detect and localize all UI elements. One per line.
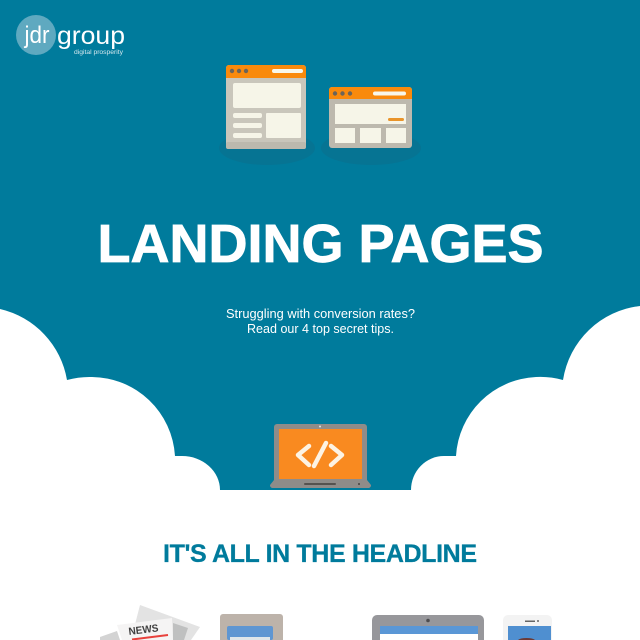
icon: smartphone	[503, 615, 552, 640]
cloud: right	[411, 306, 640, 500]
subtitle	[226, 307, 415, 336]
logo: jdr group: jdr	[24, 22, 50, 49]
logo: jdr group: digital prosperity	[74, 50, 123, 56]
cloud: left	[0, 309, 220, 500]
icon: laptop with code symbol	[270, 424, 371, 488]
icon: large tablet	[372, 615, 484, 640]
section heading: IT'S ALL IN THE HEADLINE	[163, 540, 477, 568]
icon: newspapers	[100, 605, 200, 640]
icon: small browser window	[321, 87, 421, 165]
logo: jdr group: group	[57, 22, 125, 50]
icon: large browser window	[219, 65, 315, 165]
title: LANDING PAGES	[98, 214, 544, 274]
icon: newspapers: NEWS	[128, 622, 159, 638]
subtitle: Read our 4 top secret tips.	[247, 322, 394, 336]
icon: tablet with blue header, beige frame	[220, 614, 283, 640]
logo: jdr group	[16, 15, 125, 56]
subtitle: Struggling with conversion rates?	[226, 307, 415, 321]
